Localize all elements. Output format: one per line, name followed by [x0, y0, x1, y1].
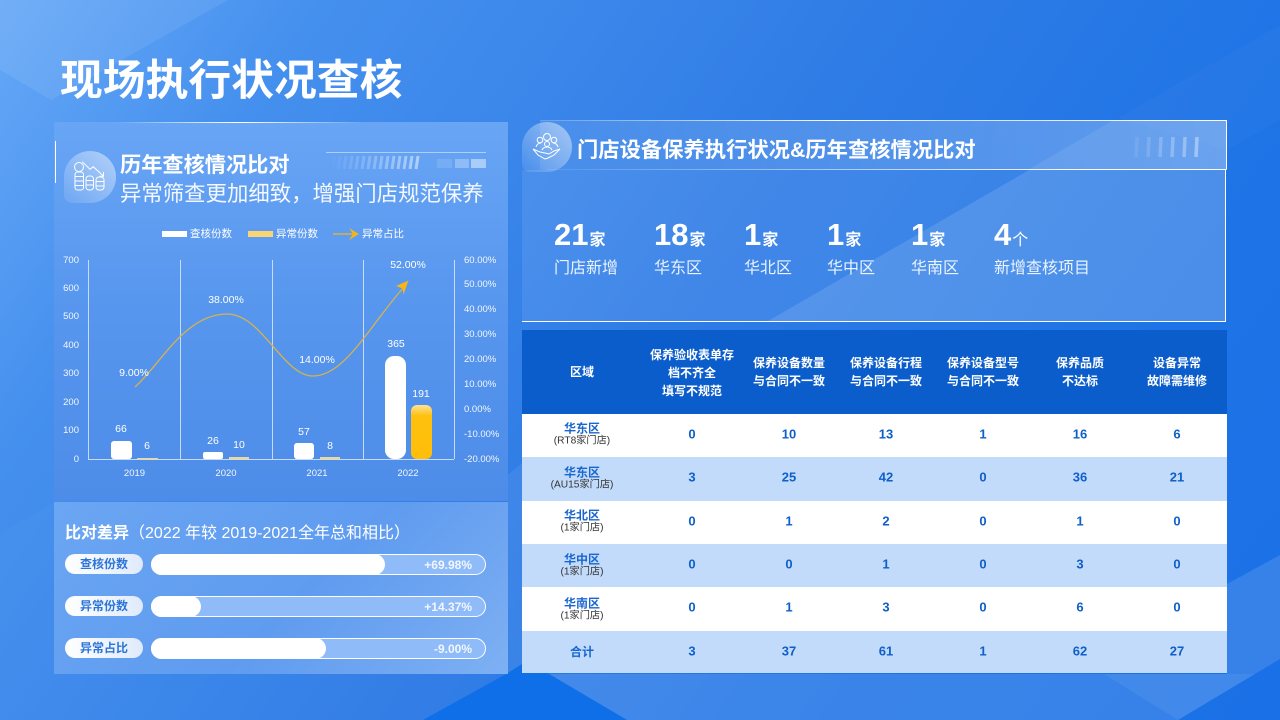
row: North: 1 — [785, 514, 793, 528]
bar row: anomaly ratio: -9.00% — [434, 642, 472, 656]
left axis: 600 — [63, 283, 79, 294]
row: North — [522, 501, 1227, 544]
row: South: 3 — [882, 600, 890, 614]
left axis: 400 — [63, 340, 79, 351]
row: North: 1 — [1076, 514, 1084, 528]
table header: 与合同不一致 — [947, 374, 1019, 388]
bar row: anomalies: +14.37% — [424, 600, 472, 614]
row: Total: 27 — [1170, 644, 1184, 658]
stat: east: 18家 — [654, 217, 706, 252]
icon: hands and people — [522, 122, 572, 172]
value labels: 6 — [144, 440, 150, 452]
bar row: anomalies: 异常份数 — [80, 599, 128, 613]
row: East RT8: 0 — [688, 426, 696, 442]
stat: central: 1家 — [827, 217, 861, 252]
panel heading: 历年查核情况比对 — [120, 154, 290, 177]
row: East AU15: 3 — [688, 470, 696, 484]
chart legend — [162, 228, 404, 240]
value labels: 10 — [233, 439, 245, 451]
row: Central: 0 — [1173, 556, 1181, 572]
row: East AU15: 0 — [979, 470, 987, 484]
table header: 设备异常 — [1153, 356, 1201, 370]
row: Central — [522, 544, 1227, 587]
stat: new audit items — [994, 217, 1090, 277]
stat: new stores: 21家 — [554, 217, 606, 252]
left axis: 100 — [63, 425, 79, 436]
chart legend: 查核份数 — [190, 228, 232, 240]
panel: historic comparison — [54, 122, 508, 501]
table header: 故障需维修 — [1147, 374, 1207, 388]
row: North: 0 — [979, 514, 987, 528]
differences heading: 比对差异（2022 年较 2019-2021全年总和相比） — [65, 525, 410, 542]
chart legend: 异常份数 — [276, 228, 318, 240]
row: East RT8: 10 — [782, 426, 796, 442]
row: North: (1家门店) — [560, 522, 604, 533]
stat: new audit items: 4个 — [994, 217, 1028, 252]
category labels: 2022 — [397, 468, 419, 479]
row: Total: 3 — [688, 644, 696, 658]
value labels: 57 — [298, 426, 310, 438]
row: Central: 0 — [785, 556, 793, 572]
stat: central — [827, 217, 875, 277]
row: East RT8: 16 — [1073, 426, 1087, 442]
right axis: 30.00% — [464, 329, 497, 340]
row: East RT8: 13 — [879, 426, 893, 442]
row: East RT8 — [522, 414, 1227, 457]
row: East AU15: 21 — [1170, 470, 1184, 484]
right axis: 60.00% — [464, 255, 497, 266]
bar row: audits: 查核份数 — [80, 557, 128, 571]
row: East AU15 — [522, 457, 1227, 501]
stat: new audit items: 新增查核项目 — [994, 260, 1090, 277]
category labels: 2021 — [306, 468, 328, 479]
combo chart — [63, 255, 500, 479]
stat: south: 1家 — [911, 217, 945, 252]
row: Total: 62 — [1073, 644, 1087, 658]
right axis: 50.00% — [464, 279, 497, 290]
row: Total: 61 — [879, 644, 893, 658]
row: South: 6 — [1076, 600, 1084, 614]
panel: comparison differences — [54, 502, 508, 674]
table header: 保养设备型号 — [947, 356, 1019, 370]
row: Central: 华中区 — [564, 552, 600, 566]
bar row: anomaly ratio: 异常占比 — [80, 641, 128, 655]
right axis: 40.00% — [464, 304, 497, 315]
right panel heading: 门店设备保养执行状况&历年查核情况比对 — [577, 138, 976, 162]
row: South: 0 — [979, 600, 987, 614]
bar row: anomaly ratio — [65, 638, 486, 659]
row: North: 2 — [882, 514, 890, 528]
right axis: 10.00% — [464, 379, 497, 390]
decorative stripes — [1134, 136, 1199, 158]
stat: east: 华东区 — [654, 260, 702, 277]
value labels: 52.00% — [390, 259, 426, 271]
bar row: audits — [65, 554, 486, 575]
row: Total: 37 — [782, 644, 796, 658]
stat: east — [654, 217, 706, 277]
stat: north: 华北区 — [744, 260, 792, 277]
row: East RT8: (RT8家门店) — [554, 435, 610, 446]
row: East AU15: (AU15家门店) — [551, 479, 613, 490]
row: East AU15: 华东区 — [564, 465, 600, 479]
row: East RT8: 1 — [979, 426, 987, 442]
table header: 与合同不一致 — [850, 374, 922, 388]
bar row: anomalies — [65, 596, 486, 617]
value labels: 191 — [412, 388, 430, 400]
stat: new stores — [554, 217, 618, 277]
table header: 档不齐全 — [668, 366, 716, 380]
stat: north — [744, 217, 792, 277]
row: South: (1家门店) — [560, 610, 604, 621]
icon: coins with falling trend — [64, 151, 116, 203]
row: South: 0 — [1173, 600, 1181, 614]
stat: south — [911, 217, 959, 277]
left axis: 300 — [63, 368, 79, 379]
row: South: 0 — [688, 600, 696, 614]
value labels: 8 — [327, 440, 333, 452]
row: North: 0 — [1173, 514, 1181, 528]
row: South: 1 — [785, 600, 793, 614]
row: East RT8: 6 — [1173, 426, 1181, 442]
stat: central: 华中区 — [827, 260, 875, 277]
row: Total: 合计 — [570, 645, 594, 659]
left axis: 700 — [63, 255, 79, 266]
row: Central: (1家门店) — [560, 566, 604, 577]
row: North: 华北区 — [564, 508, 600, 522]
stat: north: 1家 — [744, 217, 778, 252]
row: Central: 3 — [1076, 556, 1084, 572]
right axis — [464, 255, 500, 465]
table header — [522, 330, 1227, 414]
stat: south: 华南区 — [911, 260, 959, 277]
row: Central: 0 — [979, 556, 987, 572]
stat: new stores: 门店新增 — [554, 260, 618, 277]
bar row: audits: +69.98% — [424, 558, 472, 572]
category labels: 2020 — [215, 468, 237, 479]
row: East AU15: 42 — [879, 470, 893, 484]
table header: 保养品质 — [1056, 356, 1104, 370]
category labels — [124, 468, 419, 479]
panel: new stores summary — [522, 120, 1227, 322]
top highlight — [114, 122, 364, 123]
right axis: 0.00% — [464, 404, 491, 415]
row: Total — [522, 631, 1227, 673]
table header: 保养设备行程 — [850, 356, 922, 370]
table header: 保养验收表单存 — [650, 348, 734, 362]
table header: 区域 — [570, 365, 594, 379]
table header: 保养设备数量 — [753, 356, 825, 370]
row: South: 华南区 — [564, 596, 600, 610]
table — [522, 330, 1227, 673]
right axis: 20.00% — [464, 354, 497, 365]
row: Total: 1 — [979, 644, 987, 658]
value labels — [115, 259, 430, 452]
left axis: 500 — [63, 311, 79, 322]
left axis — [63, 255, 79, 465]
row: East AU15: 25 — [782, 470, 796, 484]
value labels: 9.00% — [119, 367, 149, 379]
left accent line — [55, 141, 56, 183]
right axis: -10.00% — [464, 429, 500, 440]
trend line — [135, 287, 404, 387]
row: East AU15: 36 — [1073, 470, 1087, 484]
right axis: -20.00% — [464, 454, 500, 465]
table header: 填写不规范 — [662, 384, 722, 398]
value labels: 38.00% — [208, 294, 244, 306]
left axis: 0 — [74, 454, 79, 465]
table header: 与合同不一致 — [753, 374, 825, 388]
value labels: 14.00% — [299, 354, 335, 366]
row: Central: 1 — [882, 556, 890, 572]
table header: 不达标 — [1062, 374, 1098, 388]
panel subheading: 异常筛查更加细致，增强门店规范保养 — [120, 182, 484, 206]
title: 现场执行状况查核 — [60, 57, 402, 105]
chart legend: 异常占比 — [362, 228, 404, 240]
row: Central: 0 — [688, 556, 696, 572]
left axis: 200 — [63, 397, 79, 408]
row: North: 0 — [688, 514, 696, 528]
category labels: 2019 — [124, 468, 145, 479]
value labels: 66 — [115, 423, 127, 435]
row: East RT8: 华东区 — [564, 421, 600, 435]
decorative header stripes — [326, 152, 486, 170]
row: South — [522, 587, 1227, 631]
value labels: 26 — [207, 435, 219, 447]
value labels: 365 — [387, 338, 405, 350]
bars — [111, 441, 132, 459]
